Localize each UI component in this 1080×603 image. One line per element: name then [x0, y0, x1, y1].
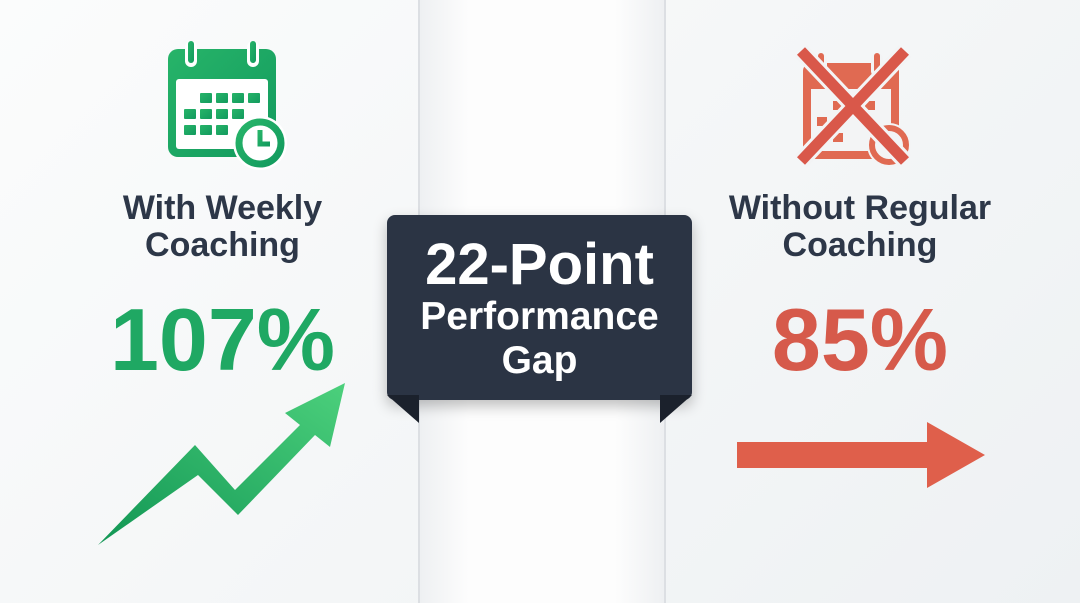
callout text: Performance — [420, 295, 659, 338]
right heading — [728, 189, 991, 264]
callout text: 22-Point — [425, 232, 654, 297]
ribbon folds — [387, 395, 692, 423]
callout text: Gap — [502, 339, 577, 382]
left heading: Coaching — [145, 226, 300, 264]
right value: 85% — [772, 290, 948, 389]
icon: red flat arrow — [737, 422, 985, 488]
icon: crossed red calendar — [797, 47, 909, 165]
right heading: Without Regular — [729, 189, 991, 227]
left heading: With Weekly — [123, 189, 322, 227]
left value: 107% — [110, 290, 335, 389]
icon: green zigzag arrow — [98, 383, 345, 545]
center callout — [387, 215, 692, 400]
left heading — [122, 189, 322, 264]
callout text — [420, 232, 659, 382]
icon: green calendar — [168, 41, 284, 168]
center band — [418, 0, 666, 603]
right heading: Coaching — [783, 226, 937, 264]
